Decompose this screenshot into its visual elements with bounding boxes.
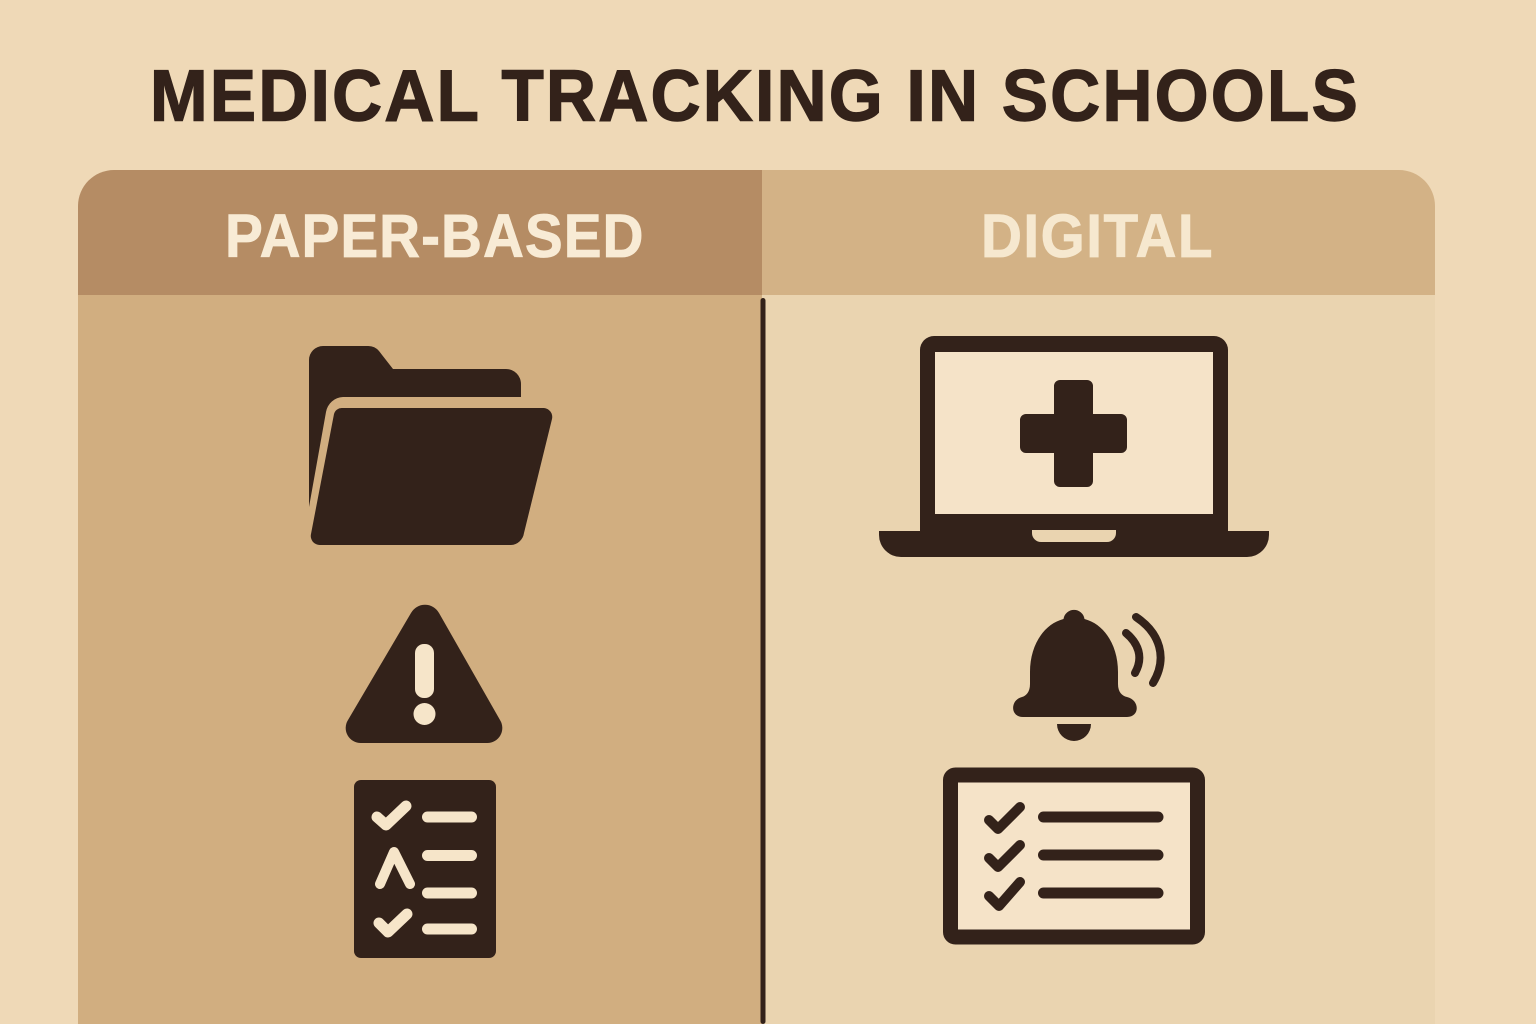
header: digital xyxy=(762,170,1435,295)
icon: warning triangle xyxy=(346,605,502,743)
icon: notification bell xyxy=(1013,610,1161,741)
icon: open folder xyxy=(309,346,552,545)
header: digital: DIGITAL xyxy=(981,203,1213,270)
panel body: digital xyxy=(762,295,1435,1024)
header: paper-based xyxy=(78,170,762,295)
icon: laptop with medical cross xyxy=(879,336,1269,557)
icon: paper checklist xyxy=(354,780,496,958)
panel: digital xyxy=(762,170,1435,1024)
icon: digital checklist screen xyxy=(950,775,1198,937)
title: MEDICAL TRACKING IN SCHOOLS xyxy=(150,55,1358,136)
header: paper-based: PAPER-BASED xyxy=(225,203,644,270)
panel body: paper-based xyxy=(78,295,762,1024)
panel: paper-based xyxy=(78,170,762,1024)
